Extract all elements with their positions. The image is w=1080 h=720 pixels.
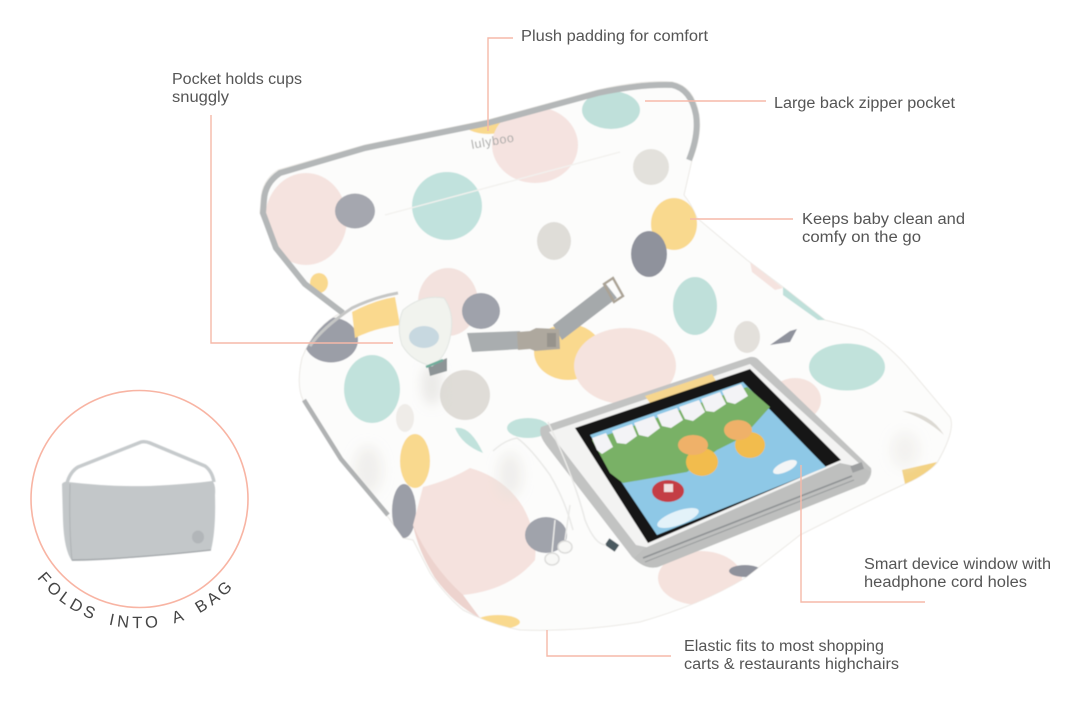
tablet pocket (540, 357, 871, 568)
cup holder with bottle (399, 297, 452, 376)
callout: keeps baby clean (690, 211, 965, 246)
yellow dot behind window (645, 374, 716, 403)
zipper band (634, 463, 871, 568)
label tag (605, 538, 619, 552)
tablet bezel (575, 369, 841, 543)
quilting lines on backrest (385, 152, 620, 215)
callout: elastic fits (547, 630, 899, 673)
brand mark: lulyboo (470, 131, 515, 152)
screen ducks (686, 448, 718, 476)
screen sign (652, 480, 684, 502)
cover body (260, 82, 951, 630)
screen grass (592, 387, 770, 483)
icon: folded bag (62, 442, 215, 561)
grey piping around backrest (263, 85, 697, 313)
screen fence pickets (592, 384, 748, 454)
callout: smart device window: Smart device window with (864, 556, 1051, 573)
callout: large back zipper pocket: Large back zipper pocket (774, 95, 956, 112)
callout: pocket holds cups: Pocket holds cups (172, 71, 302, 88)
buckle strap (467, 278, 623, 352)
callout: elastic fits: Elastic fits to most shopping (684, 638, 884, 655)
callout: keeps baby clean: Keeps baby clean and (802, 211, 965, 228)
fabric shadows (422, 365, 442, 405)
seat cover product (260, 82, 951, 630)
tablet screen (590, 382, 826, 535)
callout: plush padding: Plush padding for comfort (521, 28, 709, 45)
grey piping on seat edge (304, 400, 388, 515)
callout: smart device window (801, 465, 1051, 602)
polka dots (265, 91, 944, 629)
callout: elastic fits: carts & restaurants highchairs (684, 656, 899, 673)
callout: pocket holds cups (172, 71, 393, 343)
cup pocket band (310, 293, 398, 346)
callout: plush padding (488, 28, 709, 131)
curved label: folds into a bag: FOLDS INTO A BAG (38, 572, 231, 628)
callout: keeps baby clean: comfy on the go (802, 229, 921, 246)
pocket frame (540, 357, 871, 568)
callout: smart device window: headphone cord holes (864, 574, 1027, 591)
bag inset (30, 390, 249, 628)
earbuds and cord (493, 422, 606, 565)
callout: pocket holds cups: snuggly (172, 89, 229, 106)
circle outline (31, 390, 248, 608)
